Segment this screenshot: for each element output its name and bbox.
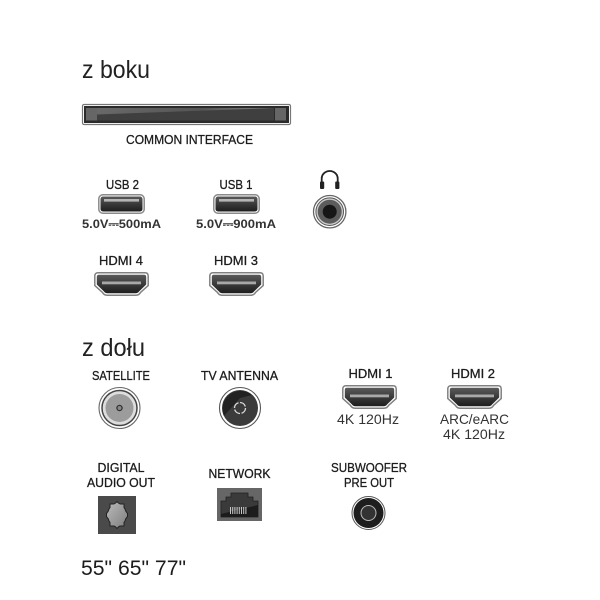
port: subwoofer pre out (331, 460, 407, 530)
port: HDMI 3: HDMI 3 (214, 253, 258, 268)
port: digital audio out (87, 460, 155, 534)
port: HDMI 2 (440, 366, 509, 442)
common interface slot (82, 104, 290, 124)
label: common interface: COMMON INTERFACE (126, 132, 253, 147)
port: HDMI 2: HDMI 2 (451, 366, 495, 381)
port: USB 1: 5.0V⎓900mA (196, 219, 276, 231)
port: USB 2: USB 2 (106, 177, 139, 192)
port: digital audio out: AUDIO OUT (87, 475, 155, 490)
port: HDMI 4 (95, 253, 148, 295)
port: HDMI 1: 4K 120Hz (337, 411, 399, 427)
icon: headphones (320, 171, 339, 189)
port: HDMI 2: 4K 120Hz (443, 426, 505, 442)
heading: z dołu: z dołu (82, 334, 145, 362)
port: HDMI 4: HDMI 4 (99, 253, 143, 268)
port: subwoofer pre out: SUBWOOFER (331, 460, 407, 475)
port: headphone jack (314, 196, 346, 228)
port: network (208, 466, 271, 521)
port: USB 2 (82, 177, 161, 231)
footer: screen sizes: 55" 65" 77" (81, 557, 186, 580)
port: network: NETWORK (208, 466, 271, 481)
port: HDMI 3 (210, 253, 263, 295)
port: HDMI 2: ARC/eARC (440, 411, 509, 427)
port: USB 1: USB 1 (220, 177, 252, 192)
port: USB 2: 5.0V⎓500mA (82, 219, 161, 231)
heading: z boku: z boku (82, 56, 150, 84)
port: satellite: SATELLITE (92, 368, 150, 383)
port: HDMI 1 (337, 366, 399, 427)
port: digital audio out: DIGITAL (98, 460, 144, 475)
port: TV antenna: TV ANTENNA (201, 368, 278, 383)
port: HDMI 1: HDMI 1 (348, 366, 392, 381)
port: satellite (92, 368, 150, 428)
port: TV antenna (201, 368, 278, 428)
port: USB 1 (196, 177, 276, 231)
port: subwoofer pre out: PRE OUT (344, 475, 394, 490)
